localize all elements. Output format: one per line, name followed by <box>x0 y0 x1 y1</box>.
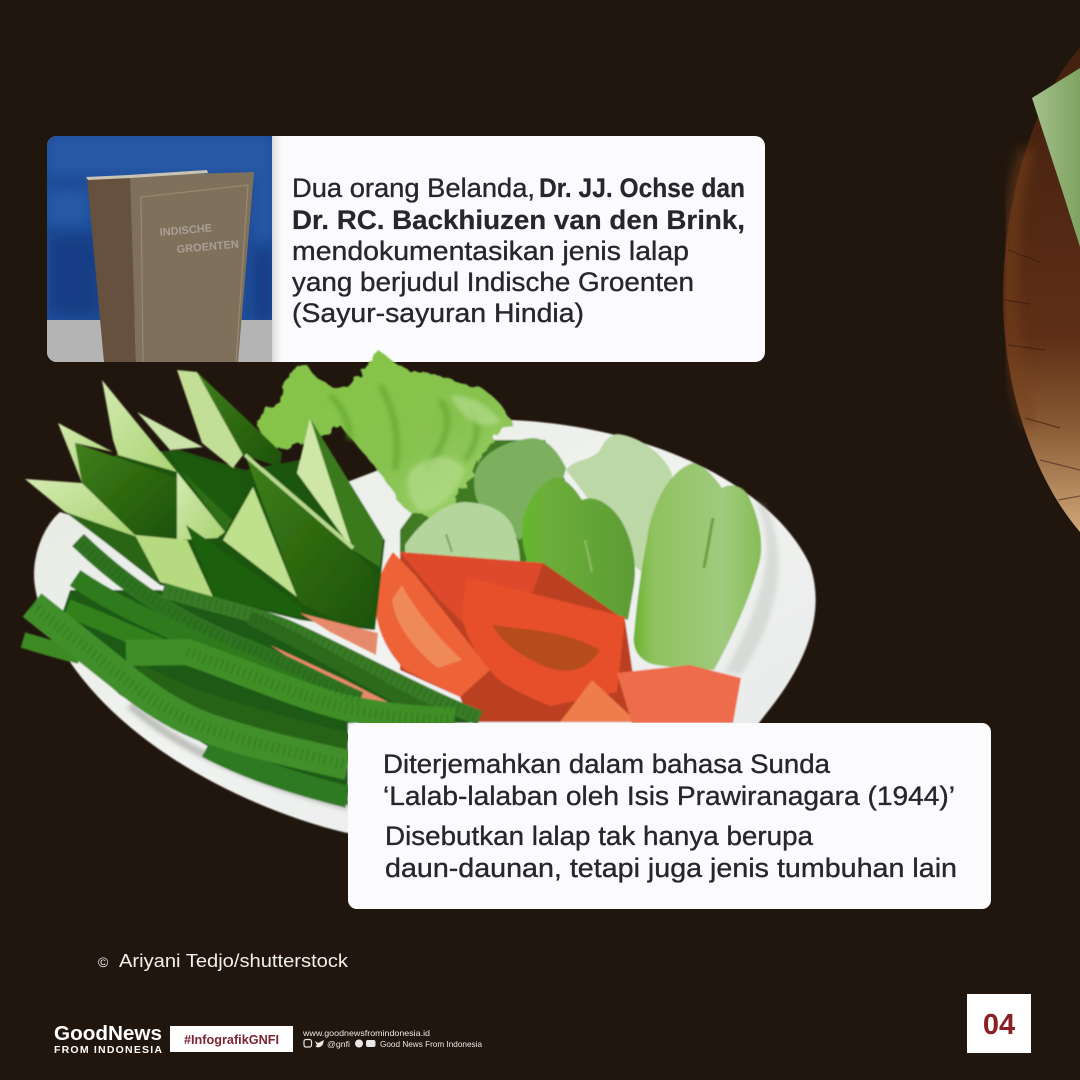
bowl body <box>1003 48 1080 532</box>
tomato backing <box>400 552 640 722</box>
big wedge pale edge <box>245 455 353 548</box>
middle skin edge <box>182 472 232 532</box>
book top pages <box>86 170 208 180</box>
woven bowl with leaf at right edge <box>1003 48 1080 532</box>
grey table <box>47 320 272 362</box>
social links: @gnfi <box>327 1039 350 1049</box>
chayote shadow on plate <box>725 500 779 675</box>
bowl weave lines <box>1004 250 1080 500</box>
cover title: INDISCHE <box>159 222 213 239</box>
page number <box>967 994 1031 1053</box>
cover title <box>160 224 238 253</box>
logo: GoodNews from Indonesia <box>54 1023 162 1056</box>
book spine <box>87 176 136 362</box>
chayote lower pale <box>405 502 520 562</box>
blue backdrop <box>47 136 272 326</box>
chayote seed mark <box>585 540 592 572</box>
card text: ‘Lalab-lalaban oleh Isis Prawiranagara (1944)’ <box>383 781 955 811</box>
top wedge skin <box>197 372 282 467</box>
cucumber dark backing <box>70 450 385 630</box>
logo: GoodNews from Indonesia: FROM INDONESIA <box>54 1044 162 1056</box>
bean strand bottom <box>207 747 348 797</box>
card text: Diterjemahkan dalam bahasa Sunda <box>383 749 831 779</box>
tomato slice behind beans <box>270 613 390 703</box>
tomato cavity <box>492 625 600 671</box>
lettuce shading <box>330 385 477 470</box>
card text: yang berjudul Indische Groenten <box>292 267 694 297</box>
flesh wedge right of centre <box>223 487 297 597</box>
tomato back wedge <box>400 552 543 640</box>
chayote large right <box>634 463 761 670</box>
bean strand second <box>163 590 480 718</box>
tomato left wedge <box>375 552 490 697</box>
photo: Indische Groenten book <box>47 136 272 362</box>
hashtag tag: #InfografikGNFI <box>184 1032 279 1047</box>
chayote bright centre <box>522 477 635 620</box>
book cover <box>130 172 254 362</box>
card background <box>47 136 765 362</box>
icon: twitter <box>315 1040 324 1047</box>
bean strand far left low <box>23 640 80 656</box>
bean strand left middle <box>75 578 320 695</box>
big dark wedge <box>245 455 375 630</box>
card text: Disebutkan lalap tak hanya berupa <box>385 821 814 851</box>
chayote slices <box>405 434 779 675</box>
cover title: GROENTEN <box>176 239 239 256</box>
backdrop light patches <box>47 136 272 240</box>
top wedge flesh <box>177 370 243 468</box>
dark lower wedge <box>186 525 302 618</box>
bean ridge texture <box>32 540 480 765</box>
dark mass under beans <box>55 590 470 805</box>
long beans <box>23 540 480 805</box>
chayote back centre <box>566 434 672 575</box>
logo: GoodNews from Indonesia: GoodNews <box>54 1023 162 1045</box>
hashtag tag <box>170 1026 293 1052</box>
card text <box>383 749 957 883</box>
card background <box>348 723 991 909</box>
card text: (Sayur-sayuran Hindia) <box>292 298 584 328</box>
bean strand left short <box>67 608 180 655</box>
icon: facebook <box>355 1040 363 1048</box>
card text: Dr. JJ. Ochse dan <box>539 173 745 203</box>
lettuce <box>256 350 512 516</box>
image shadow <box>272 136 286 362</box>
bowl rim shading <box>1010 150 1032 425</box>
bean strand thick centre <box>126 652 455 720</box>
right wedge skin <box>310 418 383 567</box>
back pale wedges <box>102 380 177 472</box>
cucumber wedges <box>25 370 385 630</box>
social links: Good News From Indonesia <box>380 1039 482 1049</box>
bean strand behind thick <box>137 673 348 743</box>
cover frame lines <box>141 185 248 362</box>
chayote seed mark <box>704 518 713 568</box>
tomato left wedge flesh <box>392 585 462 668</box>
icon: instagram <box>304 1040 312 1047</box>
tomato centre wedge <box>463 577 625 706</box>
card text: Dr. RC. Backhiuzen van den Brink, <box>292 205 745 235</box>
chayote back left <box>474 438 566 540</box>
white plate <box>34 420 816 833</box>
dark middle wedge <box>170 450 242 517</box>
photo credit: Ariyani Tedjo/shutterstock <box>119 951 349 971</box>
middle flesh wedge <box>177 472 225 540</box>
backdrop dark patches <box>50 235 272 320</box>
chayote seed mark <box>446 534 452 552</box>
card text: daun-daunan, tetapi juga jenis tumbuhan lain <box>385 853 957 883</box>
left pale wedge <box>25 479 137 537</box>
plate of lalap <box>23 350 816 833</box>
back pale sliver <box>137 412 203 450</box>
card: book description <box>47 136 765 362</box>
card: translation note <box>348 723 991 909</box>
left wedge skin <box>65 512 158 582</box>
social links <box>302 1028 482 1049</box>
deep green shade behind chayote <box>400 440 565 565</box>
right wedge flesh <box>297 418 353 550</box>
tomato bottom right <box>617 665 741 723</box>
plate lower rim shadow <box>130 705 348 806</box>
bean strand big lower <box>32 605 348 765</box>
photo credit: © <box>98 954 109 970</box>
social links: www.goodnewsfromindonesia.id <box>302 1028 430 1038</box>
card text: Dua orang Belanda, <box>292 173 535 203</box>
bean strand third <box>250 618 432 713</box>
tomato wedges <box>375 552 741 723</box>
icon: youtube <box>366 1040 376 1047</box>
card text: mendokumentasikan jenis lalap <box>292 236 689 266</box>
tomato bottom centre <box>560 680 637 722</box>
banana leaf <box>1032 68 1080 247</box>
upper left skin wedge <box>75 443 177 538</box>
lettuce light patches <box>407 395 500 512</box>
left pale tip <box>58 423 113 483</box>
card text <box>292 173 745 328</box>
page number: 04 <box>983 1009 1015 1041</box>
bean strand upper long <box>78 540 360 700</box>
lower flesh wedge <box>135 535 213 597</box>
